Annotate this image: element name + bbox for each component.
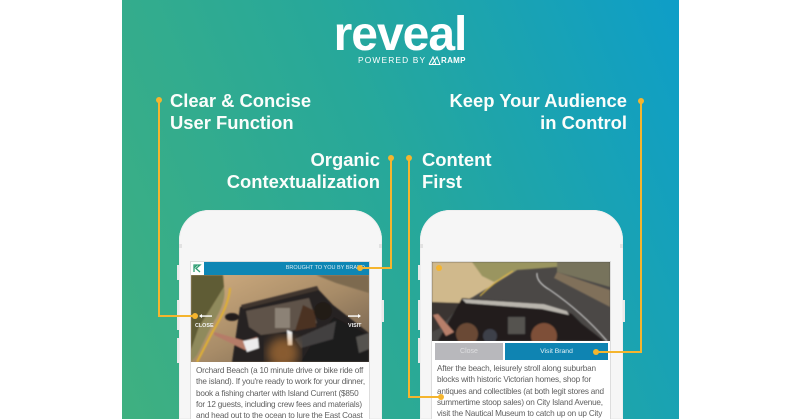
heading: content first: Content <box>422 149 491 170</box>
button: visit brand <box>505 343 608 360</box>
phone right <box>418 210 625 419</box>
heading: content first: First <box>422 170 462 192</box>
brand bar <box>191 262 369 275</box>
connector: keep your audience <box>593 98 644 355</box>
article text left: the island). If you're ready to work for your dinner, <box>196 377 365 386</box>
heading: clear and concise <box>170 90 311 132</box>
photo: convertible on road <box>432 262 610 341</box>
screen left <box>191 262 369 419</box>
brand bar: BROUGHT TO YOU BY BRAND <box>286 265 365 271</box>
photo: convertible from behind: VISIT <box>348 323 362 329</box>
article text left: book a fishing charter with Island Current ($850 <box>196 389 358 398</box>
decorative dot on photo <box>436 265 442 271</box>
phone left <box>177 210 384 419</box>
logo: reveal powered by ramp: RAMP <box>441 56 466 65</box>
article text left <box>196 366 365 419</box>
heading: organic contextualization <box>227 149 380 192</box>
heading: content first <box>422 149 492 192</box>
button: close: Close <box>460 348 478 355</box>
photo: convertible from behind: CLOSE <box>195 323 214 329</box>
screen right <box>432 262 610 419</box>
button: close <box>435 343 503 360</box>
heading: organic contextualization: Contextualization <box>227 170 380 192</box>
article text right: antiques and collectibles (at both legit stores and <box>437 387 604 396</box>
heading: clear and concise: Clear & Concise <box>170 90 311 111</box>
article text right: After the beach, leisurely stroll along suburban <box>437 364 596 373</box>
gradient background panel <box>122 0 679 419</box>
article text left: Orchard Beach (a 10 minute drive or bike ride off <box>196 366 363 375</box>
article text right: summertime stoop sales) on City Island Avenue, <box>437 398 603 407</box>
article text right: visit the Nautical Museum to catch up on up City <box>437 409 602 418</box>
heading: keep your audience <box>450 90 627 132</box>
article text right <box>437 364 604 418</box>
photo: convertible from behind <box>191 275 369 362</box>
heading: clear and concise: User Function <box>170 112 294 132</box>
connector: content first <box>406 155 444 400</box>
connector: clear and concise <box>156 97 198 319</box>
logo: reveal powered by ramp: POWERED BY <box>358 55 426 65</box>
heading: organic contextualization: Organic <box>310 149 380 170</box>
heading: keep your audience: in Control <box>540 112 627 132</box>
heading: keep your audience: Keep Your Audience <box>450 90 627 111</box>
article text right: blocks with historic Victorian homes, shop for <box>437 375 591 384</box>
connector: organic contextualization <box>357 155 394 271</box>
article text left: for 12 guests, including crew fees and materials) <box>196 400 362 409</box>
button: visit brand: Visit Brand <box>540 348 573 355</box>
logo: reveal powered by ramp: reveal <box>334 8 466 61</box>
